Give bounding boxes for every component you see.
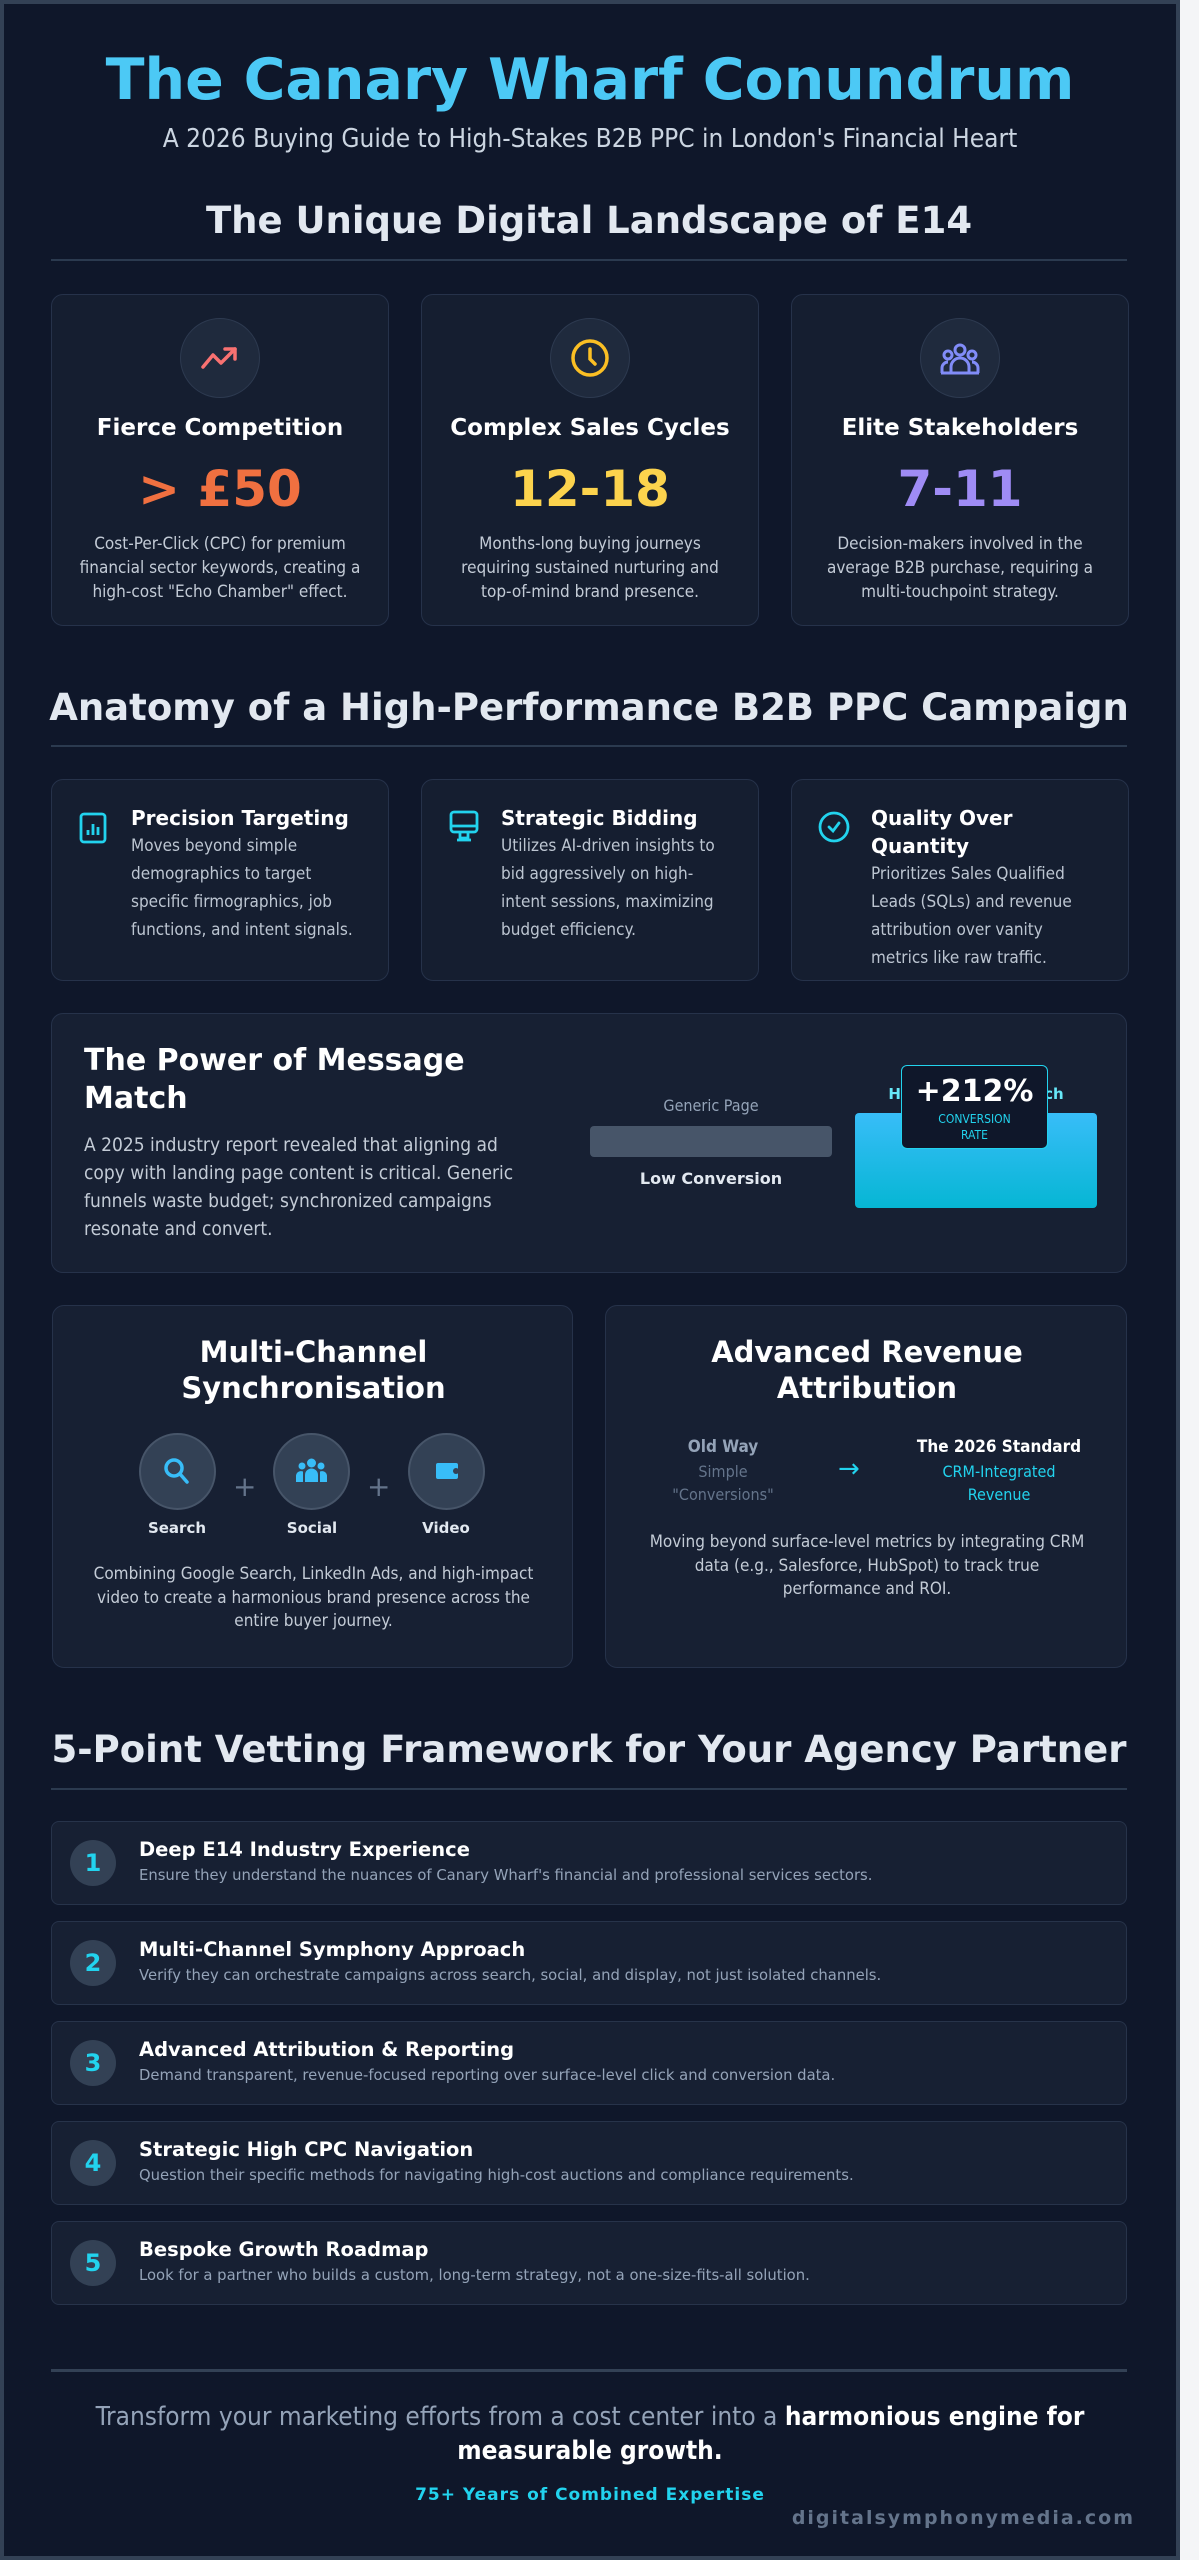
panel: multi-channel: Multi-Channel (200, 1335, 427, 1369)
card: strategic bidding: Utilizes AI-driven insights to bid aggressively on high-intent sessions, maximizing budget efficiency. (501, 836, 715, 940)
chart: high message match bar (855, 1065, 1097, 1208)
icon: video (408, 1433, 485, 1510)
text: Social (287, 1519, 337, 1537)
chart: high message match bar: High Message Match (888, 1085, 1064, 1103)
new standard: Revenue (968, 1485, 1030, 1504)
panel: revenue attribution: Attribution (777, 1371, 957, 1405)
stat: > £50 (138, 460, 302, 518)
old way (672, 1437, 774, 1504)
panel: multi-channel: Synchronisation (181, 1371, 446, 1405)
card: precision targeting: Precision Targeting (131, 806, 349, 830)
heading: unique landscape: The Unique Digital Landscape of E14 (206, 199, 972, 242)
list item 4: Question their specific methods for navigating high-cost auctions and compliance requirements. (139, 2167, 854, 2184)
plus signs: + (233, 1470, 256, 1503)
subtitle: A 2026 Buying Guide to High-Stakes B2B PPC in London's Financial Heart (163, 124, 1017, 154)
icon: chart (80, 812, 106, 844)
arrow: → (838, 1454, 860, 1484)
old way: "Conversions" (672, 1485, 774, 1504)
heading: The Power of Message Match (84, 1043, 465, 1116)
panel: revenue attribution (605, 1305, 1127, 1668)
card: complex sales cycles: Months-long buying journeys requiring sustained nurturing and top-of-mind brand presence. (461, 534, 719, 602)
callout: +212%: CONVERSION (938, 1112, 1011, 1126)
new standard: CRM-Integrated (942, 1462, 1056, 1480)
heading: vetting framework: 5-Point Vetting Framework for Your Agency Partner (52, 1728, 1126, 1771)
icon: search (139, 1433, 216, 1510)
callout: +212% (901, 1065, 1048, 1149)
chart: generic page bar (590, 1096, 832, 1188)
list item 2: Multi-Channel Symphony Approach (139, 1938, 525, 1961)
list item 3: Demand transparent, revenue-focused reporting over surface-level click and conversion data. (139, 2067, 835, 2084)
list item 4: Strategic High CPC Navigation (139, 2138, 473, 2161)
list item 3 (51, 2021, 1127, 2105)
channel labels: Search (148, 1519, 206, 1537)
icon: social (273, 1433, 350, 1510)
icon: monitor (450, 810, 478, 842)
list item 3: Advanced Attribution & Reporting (139, 2038, 514, 2061)
icon: check circle (818, 812, 850, 842)
card: fierce competition (51, 294, 389, 626)
card: complex sales cycles: 12-18 (510, 460, 670, 518)
card: quality over quantity (791, 779, 1129, 981)
card: complex sales cycles (421, 294, 759, 626)
list item 3: 3 (85, 2049, 101, 2077)
list item 4: 4 (85, 2149, 101, 2177)
old way: Old Way (688, 1437, 758, 1457)
card: elite stakeholders (791, 294, 1129, 626)
text: + (367, 1470, 390, 1503)
icon: group (920, 318, 1000, 398)
icon: clock (550, 318, 630, 398)
list item 2: 2 (85, 1949, 101, 1977)
domain: digitalsymphonymedia.com (792, 2507, 1135, 2529)
new standard: The 2026 Standard (917, 1437, 1081, 1457)
list item 5: 5 (85, 2249, 101, 2277)
list item 5: Look for a partner who builds a custom, long-term strategy, not a one-size-fits-all solution. (139, 2267, 810, 2284)
chart: generic page bar: Low Conversion (640, 1169, 782, 1188)
list item 5 (51, 2221, 1127, 2305)
list item 1 (51, 1821, 1127, 1905)
panel: revenue attribution: Advanced Revenue (711, 1335, 1023, 1369)
list item 4 (51, 2121, 1127, 2205)
card: elite stakeholders: 7-11 (897, 460, 1023, 518)
list item 2: Verify they can orchestrate campaigns across search, social, and display, not just isolated channels. (139, 1967, 881, 1984)
list item 1: 1 (85, 1849, 101, 1877)
title: The Canary Wharf Conundrum (106, 47, 1074, 113)
panel: multi-channel: Combining Google Search, LinkedIn Ads, and high-impact video to create a harmonious brand presence across the entire buyer journey. (94, 1564, 533, 1631)
card: elite stakeholders: Decision-makers involved in the average B2B purchase, requiring a multi-touchpoint strategy. (827, 534, 1093, 602)
paragraph: A 2025 industry report revealed that aligning ad copy with landing page content is critical. Generic funnels waste budget; synchronized campaigns resonate and convert. (84, 1134, 513, 1240)
panel: revenue attribution: Moving beyond surface-level metrics by integrating CRM data (e.g., Salesforce, HubSpot) to track true performance and ROI. (650, 1532, 1084, 1599)
card: precision targeting: Moves beyond simple demographics to target specific firmographics, job functions, and intent signals. (131, 836, 353, 940)
panel: message match (51, 1013, 1127, 1273)
card: fierce competition: Cost-Per-Click (CPC) for premium financial sector keywords, creating a high-cost "Echo Chamber" effect. (80, 534, 360, 602)
card: complex sales cycles: Complex Sales Cycles (450, 415, 730, 441)
chart: generic page bar: Generic Page (663, 1096, 759, 1115)
card: fierce competition: Fierce Competition (97, 415, 343, 441)
callout: +212%: RATE (961, 1128, 988, 1142)
text: Video (422, 1519, 470, 1537)
footer tagline: Transform your marketing efforts from a cost center into a harmonious engine for measurable growth. (96, 2402, 1084, 2466)
list item 1: Ensure they understand the nuances of Canary Wharf's financial and professional services sectors. (139, 1867, 872, 1884)
card: strategic bidding: Strategic Bidding (501, 806, 698, 830)
icon: trend up (180, 318, 260, 398)
card: elite stakeholders: Elite Stakeholders (842, 415, 1078, 441)
list item 1: Deep E14 Industry Experience (139, 1838, 470, 1861)
card: precision targeting (51, 779, 389, 981)
card: strategic bidding (421, 779, 759, 981)
card: quality over quantity: Prioritizes Sales Qualified Leads (SQLs) and revenue attribution over vanity metrics like raw traffic. (871, 864, 1072, 968)
list item 2 (51, 1921, 1127, 2005)
card: quality over quantity: Quality Over Quantity (871, 806, 1012, 858)
expertise badge: 75+ Years of Combined Expertise (415, 2485, 765, 2505)
old way: Simple (698, 1462, 748, 1480)
heading: anatomy: Anatomy of a High-Performance B2B PPC Campaign (49, 686, 1129, 729)
callout: +212%: +212% (916, 1074, 1033, 1109)
new standard (916, 1437, 1081, 1504)
panel: multi-channel (52, 1305, 573, 1668)
list item 5: Bespoke Growth Roadmap (139, 2238, 429, 2261)
